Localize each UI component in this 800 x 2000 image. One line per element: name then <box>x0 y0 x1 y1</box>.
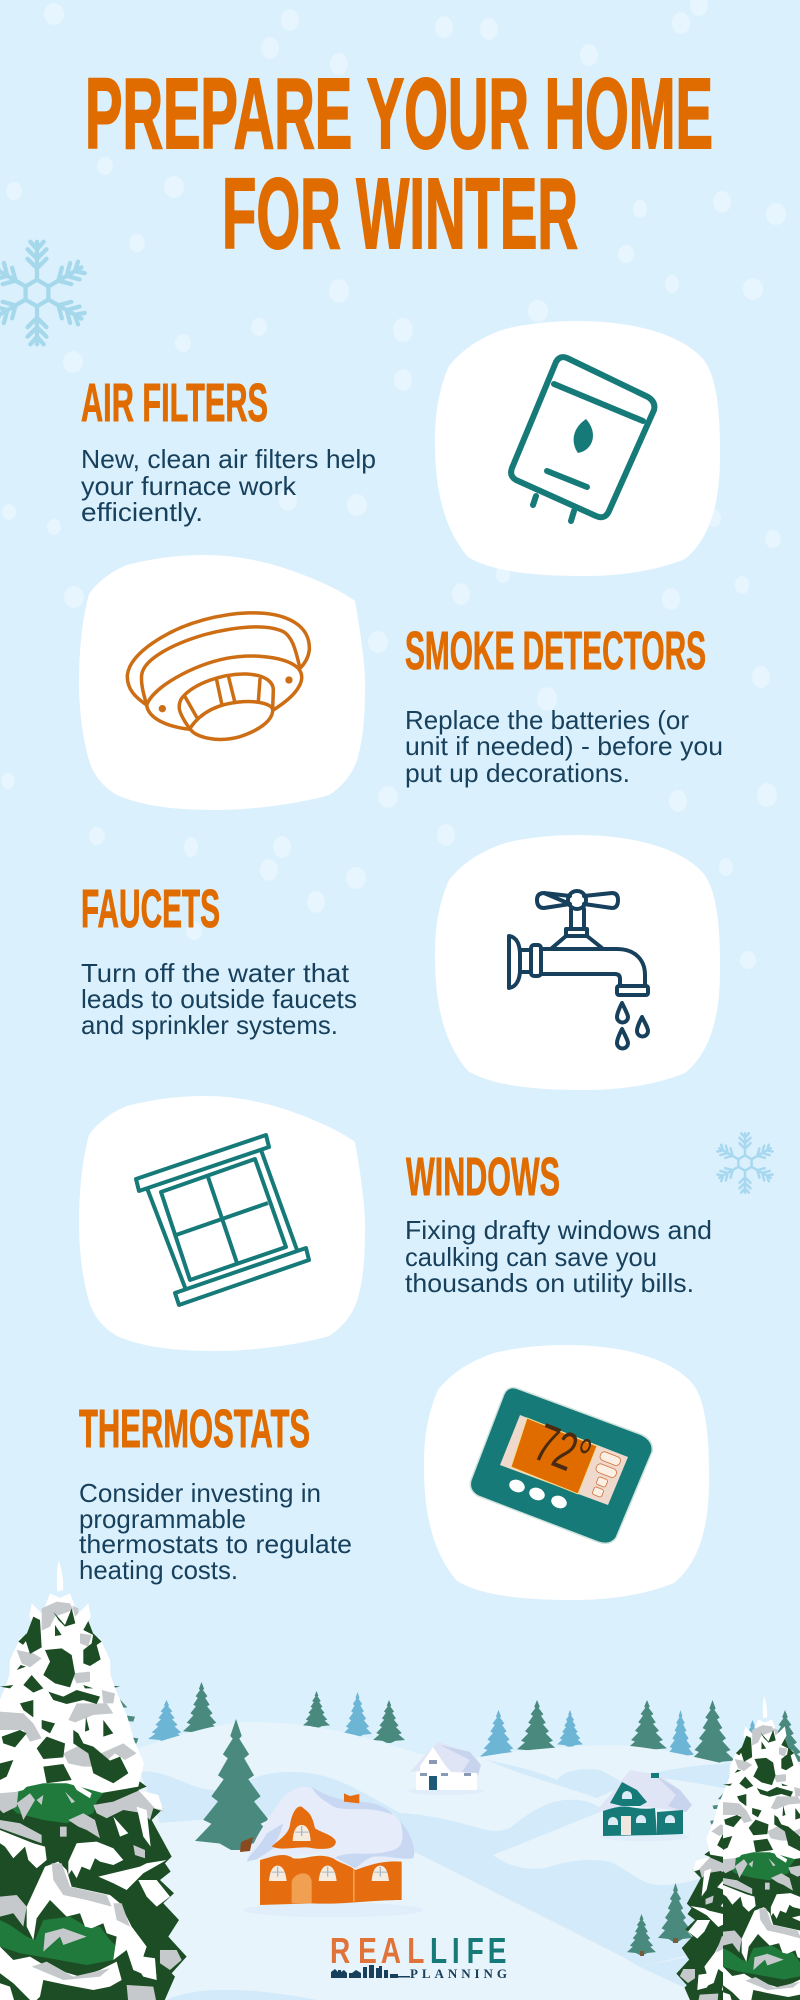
white blob <box>435 321 720 576</box>
icon: thermostat <box>470 1388 652 1543</box>
body: faucets <box>81 958 357 1040</box>
big snowy tree right <box>676 1696 800 2000</box>
house: teal cottage <box>596 1770 692 1841</box>
title <box>85 58 713 270</box>
logo: PLANNING <box>410 1966 507 1981</box>
body: windows: caulking can save you <box>405 1242 657 1272</box>
heading: faucets: FAUCETS <box>81 879 220 939</box>
heading: thermostats: THERMOSTATS <box>79 1399 310 1459</box>
white blob <box>435 835 720 1090</box>
body: smoke detectors: put up decorations. <box>405 758 630 788</box>
house: orange cottage <box>243 1787 423 1917</box>
falling snow dots <box>1 0 786 969</box>
logo <box>330 1931 507 1981</box>
snow streams <box>140 1772 730 1967</box>
big snowy tree left <box>0 1560 187 2000</box>
panel: air filters <box>81 321 720 576</box>
logo: LIFE <box>430 1931 506 1971</box>
panel: smoke detectors <box>79 555 723 810</box>
body: air filters: New, clean air filters help <box>81 444 376 474</box>
white blob <box>79 1096 365 1351</box>
panel: thermostats <box>79 1345 709 1600</box>
winter landscape <box>0 1560 800 2000</box>
body: thermostats: heating costs. <box>79 1555 238 1585</box>
white blob <box>79 555 365 810</box>
body: smoke detectors <box>405 705 723 788</box>
heading: windows: WINDOWS <box>406 1147 560 1207</box>
body: faucets: leads to outside faucets <box>81 984 357 1014</box>
icon: small snowflake <box>717 1133 773 1193</box>
body: faucets: and sprinkler systems. <box>81 1010 338 1040</box>
icon: smoke detector <box>127 613 309 739</box>
body: thermostats: Consider investing in <box>79 1478 321 1508</box>
house: white cottage <box>408 1742 484 1795</box>
body: air filters <box>81 444 376 527</box>
body: air filters: your furnace work <box>81 471 297 501</box>
icon: furnace filter <box>511 357 654 521</box>
logo skyline <box>331 1965 410 1978</box>
white blob <box>424 1345 709 1600</box>
back tree row <box>148 1682 800 1765</box>
body: air filters: efficiently. <box>81 497 203 527</box>
logo: REAL <box>330 1931 424 1971</box>
body: windows: Fixing drafty windows and <box>405 1215 712 1245</box>
panel: faucets <box>81 835 720 1090</box>
reading: 72 degrees: 72° <box>526 1412 599 1488</box>
icon: large snowflake <box>0 242 86 344</box>
panel: windows <box>79 1096 712 1351</box>
icon: window <box>136 1135 309 1305</box>
mid firs <box>195 1719 693 1956</box>
snow hills <box>0 1722 800 2000</box>
body: smoke detectors: unit if needed) - before you <box>405 731 723 761</box>
body: thermostats: thermostats to regulate <box>79 1529 352 1559</box>
body: windows <box>405 1215 712 1298</box>
heading: air filters: AIR FILTERS <box>81 373 268 433</box>
body: faucets: Turn off the water that <box>81 958 350 988</box>
body: thermostats <box>79 1478 352 1585</box>
body: smoke detectors: Replace the batteries (or <box>405 705 689 735</box>
body: thermostats: programmable <box>79 1504 246 1534</box>
body: windows: thousands on utility bills. <box>405 1268 694 1298</box>
icon: faucet <box>509 891 648 1048</box>
